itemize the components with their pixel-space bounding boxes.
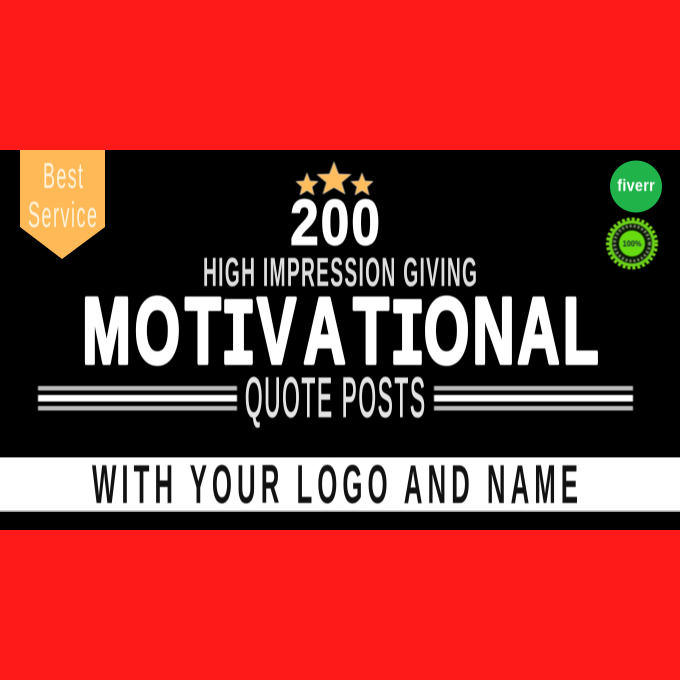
best service ribbon badge [20,150,105,259]
icon: fiverr logo [610,160,662,212]
white band with tagline [0,454,680,516]
heading: motivational: I [221,286,256,392]
heading: motivational: O [424,278,469,383]
heading: motivational: M [82,278,131,383]
icon: 100% guarantee seal: 100% [622,240,642,248]
best service ribbon badge: Service [28,195,97,236]
heading: motivational: L [563,278,598,383]
divider lines: right [434,386,633,410]
heading: motivational: T [185,278,221,383]
heading: motivational: N [472,278,515,383]
heading: motivational: V [257,278,296,383]
best service ribbon badge: Best [43,156,83,197]
heading: motivational: T [353,278,389,383]
divider lines: left [38,386,237,410]
subheading: quote posts: QUOTE POSTS [245,367,425,430]
tagline: with your logo and name: WITH YOUR LOGO AND NAME [92,454,578,516]
heading: motivational: A [303,278,346,383]
black banner panel [0,150,680,530]
icon: three stars [296,162,373,195]
icon: 100% guarantee seal [608,219,656,268]
icon: fiverr logo: fiverr [617,177,655,195]
subheading: high impression giving: HIGH IMPRESSION GIVING [203,249,477,295]
heading: motivational: I [390,286,425,392]
heading: motivational: A [517,278,560,383]
heading: motivational: O [135,278,180,383]
heading: 200: 200 [290,188,380,259]
